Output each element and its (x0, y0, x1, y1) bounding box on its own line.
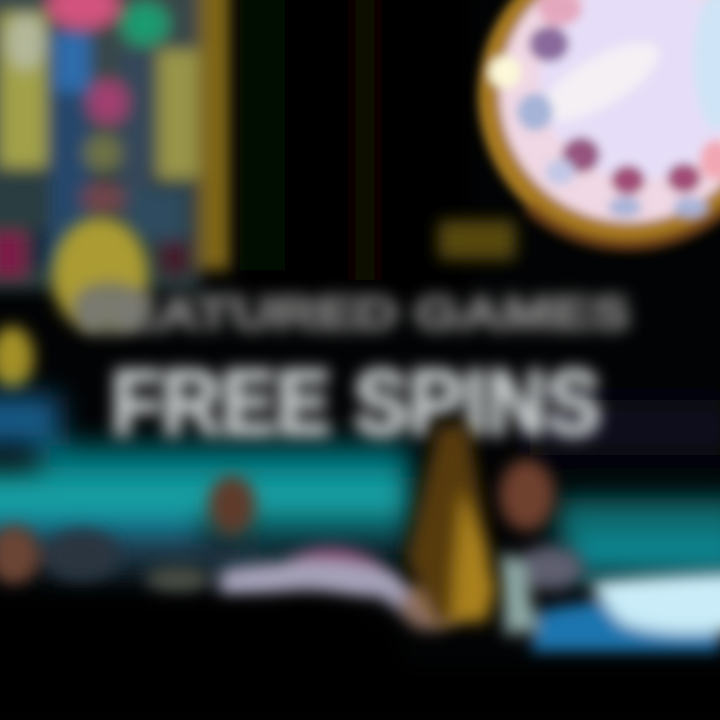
panel: teal table (0, 395, 720, 575)
icon: player head far left (0, 525, 40, 585)
panel: slot machine wall (0, 0, 232, 290)
icon: green light (121, 2, 169, 46)
icon: white glow (588, 572, 720, 634)
icon: gold sign (438, 220, 516, 260)
icon: player head right (499, 459, 555, 531)
heading: free spins: FREE SPINS (111, 352, 601, 454)
icon: golden figure (406, 425, 496, 625)
icon: pink light (47, 0, 119, 28)
icon: left yellow panel (0, 13, 46, 167)
icon: pink chips strip (285, 547, 385, 578)
grey mound (516, 546, 584, 590)
icon: crimson panel (0, 232, 26, 277)
player shoulders (44, 529, 120, 581)
icon: tan pour (400, 582, 460, 630)
icon: maroon light (81, 183, 125, 213)
icon: pale highlight (6, 14, 46, 70)
icon: pale streak (500, 552, 538, 635)
icon: roulette wheel (478, 0, 720, 245)
foreground players (0, 459, 720, 652)
icon: blue column (54, 33, 90, 91)
text block: headline (82, 287, 630, 454)
icon: gold coin medallion (0, 217, 148, 390)
dark centre column (240, 0, 470, 300)
icon: pale table cloth (220, 560, 442, 625)
subheading: FEATURED GAMES (82, 287, 630, 339)
icon: magenta light (88, 80, 128, 124)
icon: olive light (84, 135, 122, 171)
footer shadow (0, 593, 720, 720)
icon: right yellow panel (158, 50, 198, 178)
icon: blue wedge (530, 600, 720, 652)
icon: gold pillar (199, 0, 232, 270)
icon: player head left (208, 475, 256, 535)
icon: wheel pockets (517, 0, 720, 217)
